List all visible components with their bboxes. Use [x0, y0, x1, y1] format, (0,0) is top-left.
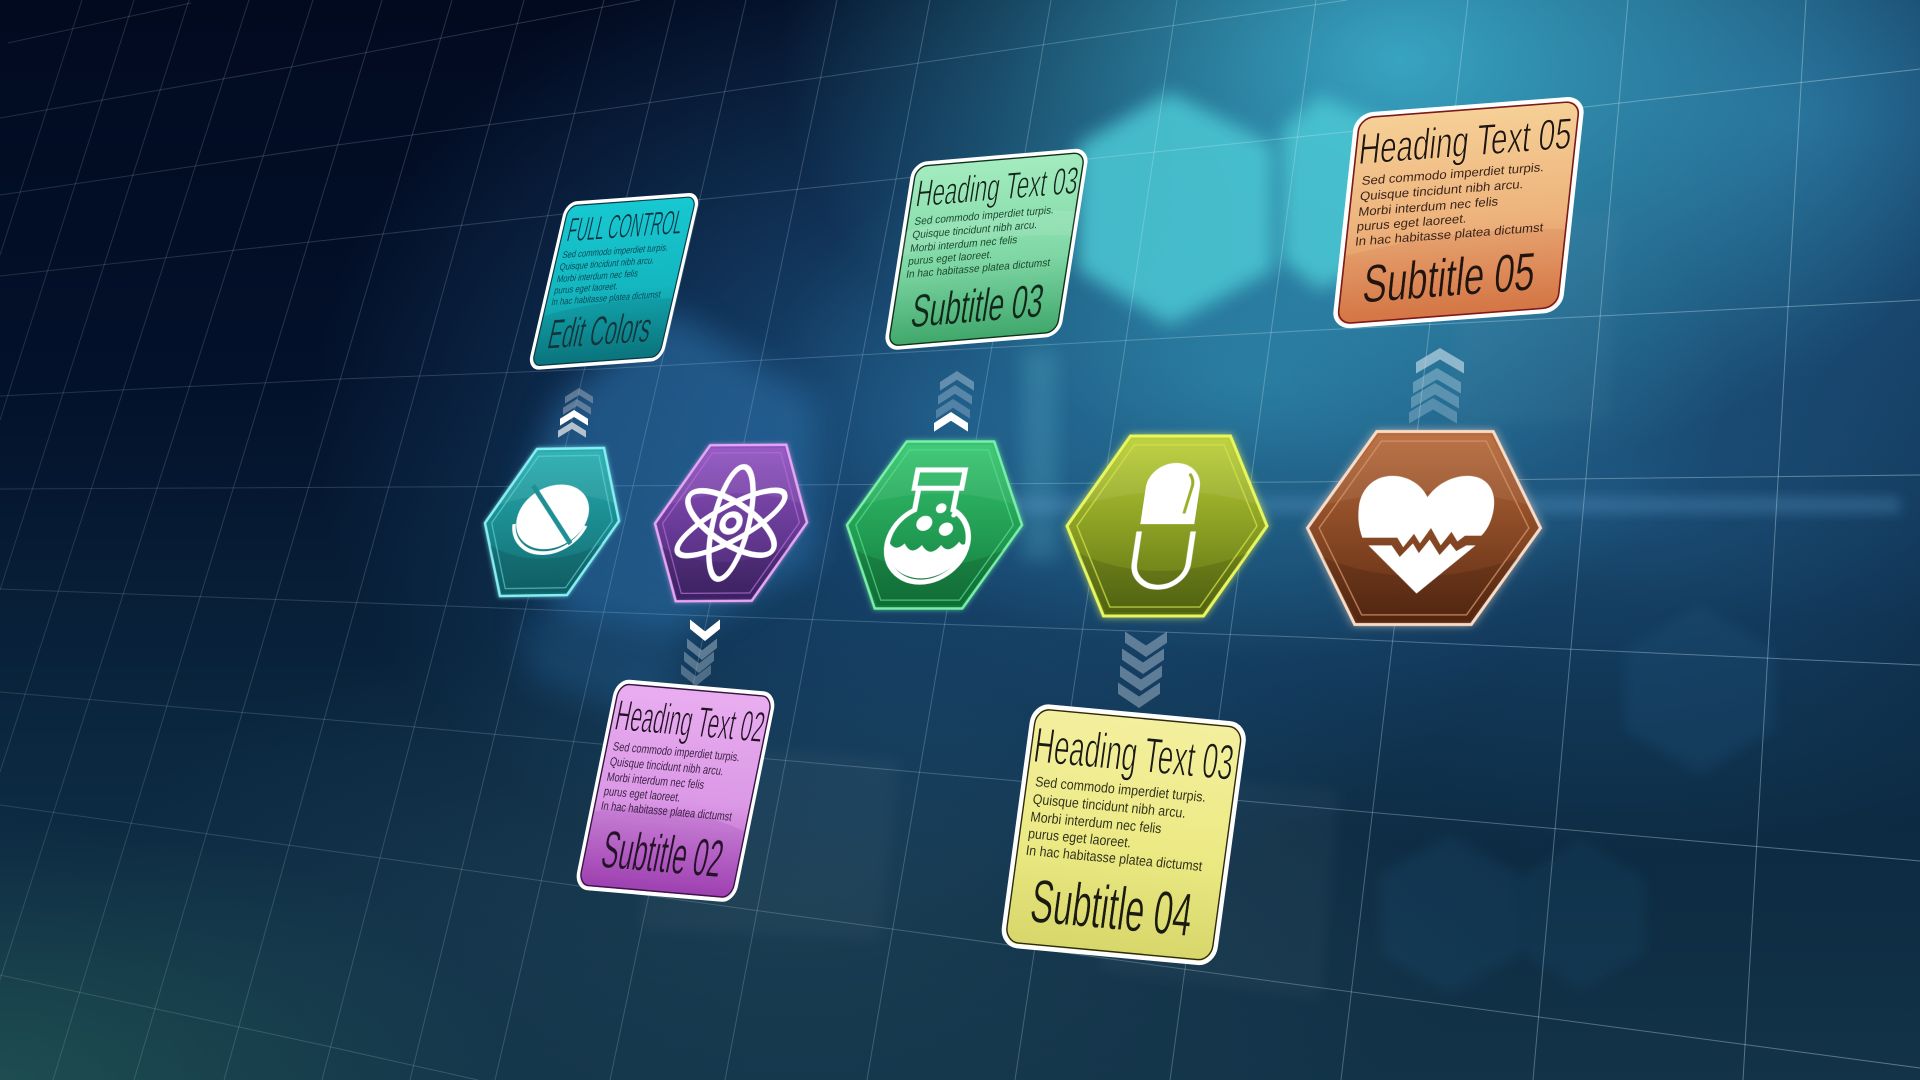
body text: Sed commodo imperdiet turpis.	[561, 242, 669, 260]
body text: Quisque tincidunt nibh arcu.	[609, 755, 725, 779]
arrow: green chevrons up	[934, 371, 974, 432]
body text	[905, 204, 1060, 281]
subtitle: Subtitle 04	[1027, 868, 1197, 950]
icon: tablet	[507, 484, 596, 554]
subtitle: Subtitle 05	[1360, 241, 1538, 314]
hexagon: purple with atom icon	[638, 444, 824, 602]
body text: In hac habitasse platea dictumst	[1025, 842, 1204, 874]
body text: Quisque tincidunt nibh arcu.	[911, 219, 1038, 242]
body text: purus eget laoreet.	[1027, 825, 1132, 851]
panel: teal card	[529, 194, 699, 368]
body text: Morbi interdum nec felis	[909, 234, 1018, 255]
panel: green card	[885, 150, 1088, 349]
icon: capsule	[1131, 463, 1203, 587]
heading: Heading Text 02	[611, 692, 769, 752]
heading: Heading Text 05	[1357, 109, 1574, 174]
body text	[600, 740, 745, 824]
icon: heart with pulse	[1349, 476, 1498, 594]
hexagon: brown with heart icon	[1296, 432, 1552, 624]
body text: In hac habitasse platea dictumst	[1354, 220, 1545, 249]
body text: Sed commodo imperdiet turpis.	[914, 204, 1055, 228]
body text: purus eget laoreet.	[553, 280, 619, 296]
body text: Morbi interdum nec felis	[1358, 194, 1499, 219]
body text: Morbi interdum nec felis	[556, 268, 640, 284]
body text: Quisque tincidunt nibh arcu.	[1359, 177, 1524, 203]
body text: Sed commodo imperdiet turpis.	[1361, 160, 1545, 188]
arrow: purple chevrons down	[681, 619, 720, 686]
panel: yellow card	[1002, 705, 1246, 964]
body text: In hac habitasse platea dictumst	[905, 257, 1051, 281]
subtitle: Subtitle 02	[597, 819, 728, 888]
heading: FULL CONTROL	[564, 203, 687, 249]
body text: Morbi interdum nec felis	[1030, 809, 1163, 837]
blurred background shapes	[520, 92, 1900, 1000]
arrow: teal chevrons up	[558, 388, 593, 438]
body text: Quisque tincidunt nibh arcu.	[559, 255, 656, 272]
body text: purus eget laoreet.	[907, 249, 993, 268]
body text: Quisque tincidunt nibh arcu.	[1032, 791, 1187, 821]
body text	[1354, 159, 1551, 249]
body text: purus eget laoreet.	[603, 785, 682, 805]
body text: In hac habitasse platea dictumst	[600, 800, 733, 824]
panel: purple card	[576, 681, 775, 901]
subtitle: Subtitle 03	[908, 274, 1047, 338]
body text	[550, 241, 673, 307]
hexagon: green with flask icon	[831, 442, 1038, 608]
subtitle: Edit Colors	[544, 304, 656, 359]
body text: Sed commodo imperdiet turpis.	[612, 740, 741, 765]
body text: In hac habitasse platea dictumst	[550, 289, 662, 307]
icon: atom	[662, 466, 800, 580]
hexagon: teal with tablet icon	[466, 448, 638, 596]
arrow: brown chevrons up	[1409, 348, 1464, 423]
body text: Morbi interdum nec felis	[606, 771, 706, 792]
icon: flask	[880, 470, 982, 582]
hexagon: yellow with capsule icon	[1054, 436, 1280, 616]
heading: Heading Text 03	[913, 158, 1082, 215]
body text: Sed commodo imperdiet turpis.	[1034, 773, 1207, 805]
arrow: yellow chevrons down	[1118, 632, 1167, 708]
body text: purus eget laoreet.	[1356, 211, 1467, 234]
heading: Heading Text 03	[1031, 716, 1237, 791]
panel: orange card	[1334, 98, 1583, 327]
body text	[1025, 773, 1213, 874]
